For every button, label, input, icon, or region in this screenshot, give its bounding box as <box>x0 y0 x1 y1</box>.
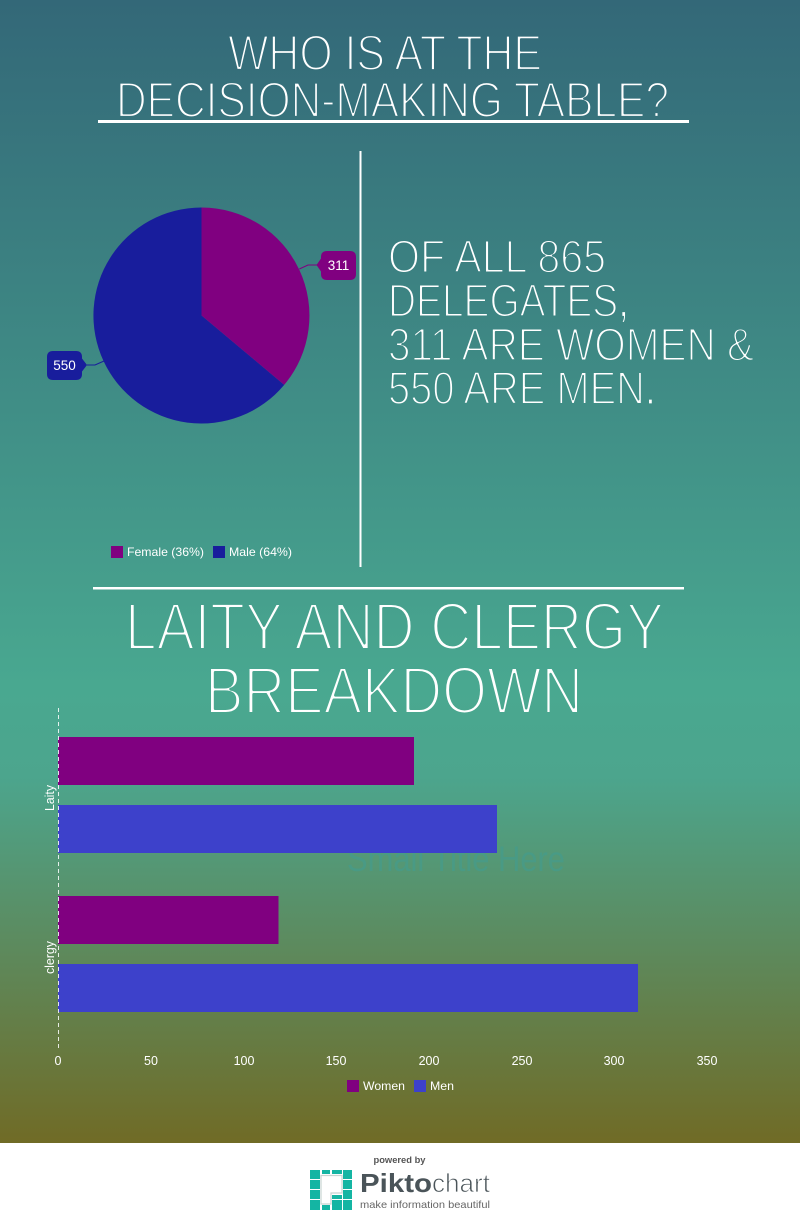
pie slice: male <box>93 207 284 423</box>
bar legend: Men <box>430 1079 454 1093</box>
callout: 311 <box>299 251 356 280</box>
title: WHO IS AT THE <box>228 25 542 81</box>
axis labels: 50 <box>144 1054 158 1068</box>
pie chart: delegates by gender <box>47 207 356 559</box>
callout: 550: 550 <box>53 358 76 373</box>
wordmark: chart <box>432 1168 491 1198</box>
title: DECISION-MAKING TABLE? <box>116 72 669 128</box>
bar chart: laity and clergy <box>42 708 717 1093</box>
bar: laity men <box>58 805 497 853</box>
axis labels: 250 <box>512 1054 532 1068</box>
faint placeholder title: Small Title Here <box>347 840 565 879</box>
category labels: clergy <box>42 941 57 974</box>
axis labels: 350 <box>697 1054 717 1068</box>
powered by: powered by <box>374 1155 426 1166</box>
wordmark: Pikto <box>360 1168 432 1198</box>
section heading: LAITY AND CLERGY <box>125 590 664 664</box>
pie legend <box>111 545 292 559</box>
axis labels: 0 <box>55 1054 62 1068</box>
footer panel <box>0 1143 800 1223</box>
axis labels: 100 <box>234 1054 254 1068</box>
wordmark <box>360 1168 491 1198</box>
icon: piktochart logo <box>310 1170 352 1210</box>
bar: laity women <box>58 737 414 785</box>
callout: 550 <box>47 351 104 380</box>
section heading <box>125 590 664 728</box>
section divider <box>93 587 684 590</box>
axis labels <box>55 1054 717 1068</box>
title <box>98 25 689 128</box>
delegates statement: OF ALL 865 <box>388 230 606 282</box>
callout: 311: 311 <box>328 258 349 273</box>
bar legend: Women <box>363 1079 405 1093</box>
bar: clergy men <box>58 964 638 1012</box>
axis line <box>58 708 60 1048</box>
bar: clergy women <box>58 896 278 944</box>
delegates statement: 311 ARE WOMEN & <box>388 318 754 370</box>
pie legend: Female (36%) <box>127 545 204 559</box>
delegates statement: 550 ARE MEN. <box>388 362 656 414</box>
axis labels: 150 <box>326 1054 346 1068</box>
bar legend <box>347 1079 454 1093</box>
pie legend: Male (64%) <box>229 545 292 559</box>
piktochart branding <box>310 1155 491 1211</box>
pie slice: female <box>202 208 309 385</box>
section heading: BREAKDOWN <box>205 654 583 728</box>
delegates statement <box>388 230 754 414</box>
axis labels: 300 <box>604 1054 624 1068</box>
axis labels: 200 <box>419 1054 439 1068</box>
category labels: Laity <box>42 785 57 811</box>
category labels <box>42 785 57 974</box>
delegates statement: DELEGATES, <box>388 274 629 326</box>
vertical divider <box>360 151 362 567</box>
tagline: make information beautiful <box>360 1199 490 1211</box>
